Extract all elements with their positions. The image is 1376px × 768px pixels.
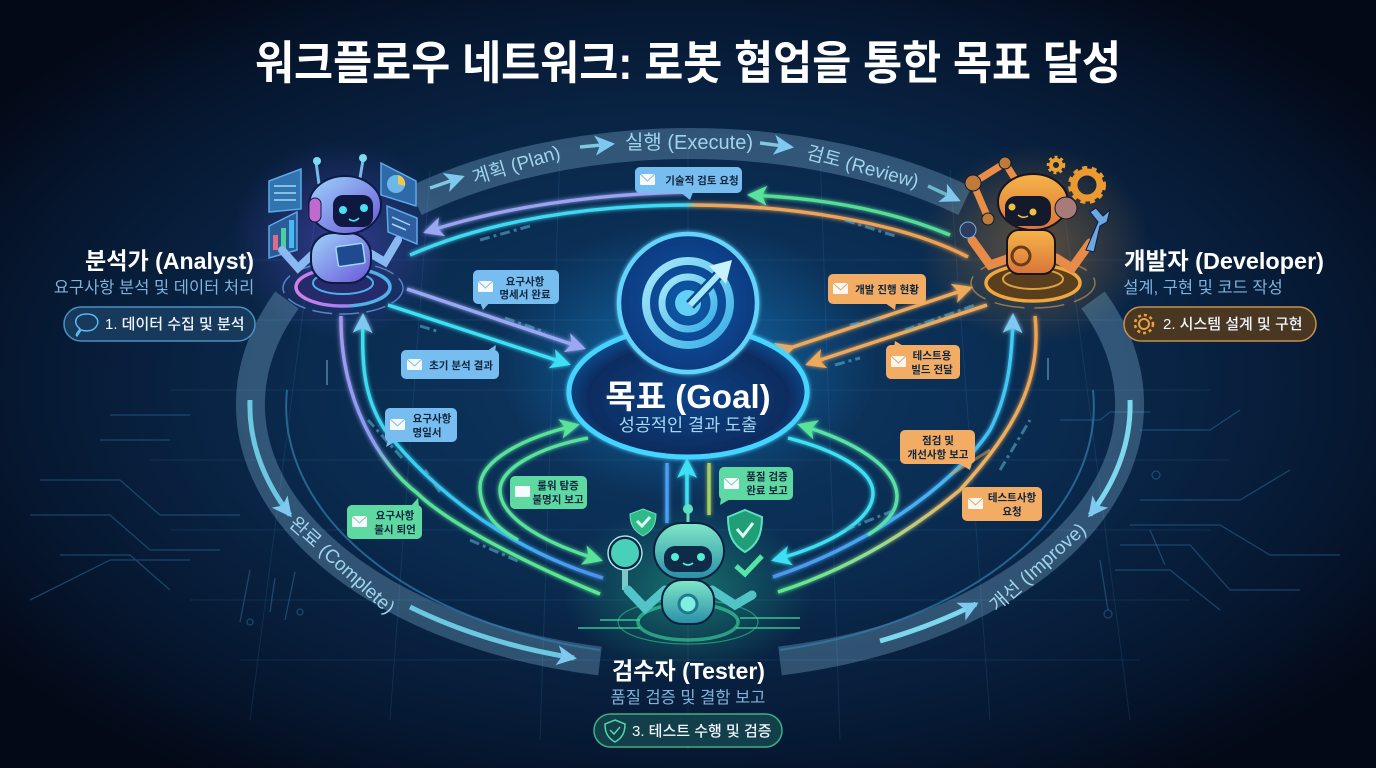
wrench [1086,208,1110,252]
robot arm [965,157,1017,225]
band segment top [415,144,965,201]
label: developer: 개발자 (Developer) [1124,248,1324,274]
message bubble: 요구사항 불시 퇴언: 불시 퇴언 [374,523,416,536]
magnifier [608,536,642,590]
goal oval [569,327,807,457]
loop: right outer [800,425,897,535]
message bubble: 룰워 탐증 불명지 보고 [510,476,587,509]
label: tester: 검수자 (Tester) [612,658,765,684]
message bubble: 테스트용 빌드 전달: 빌드 전달 [911,364,953,376]
robot: analyst [269,154,417,314]
glow: developer [920,145,1150,345]
message bubble: 초기 분석 결과 [401,345,499,379]
loop: left inner [500,438,600,560]
arms [282,240,398,268]
robot: tester [578,504,800,644]
arrow: green from developer [750,195,950,235]
band arrow review end [928,186,958,200]
floating panels [269,163,417,258]
pill: analyst task [64,307,255,341]
label: developer: 설계, 구현 및 코드 작성 [1123,278,1283,297]
arrow: goal and developer double headed [793,288,970,347]
message bubble: 요구사항 명일서 [385,408,457,447]
band segment left [250,300,600,661]
glow: tester [563,505,813,675]
label: analyst: 요구사항 분석 및 데이터 처리 [54,278,254,297]
band label improve: 개선 (Improve) [985,519,1091,616]
message bubble: 테스트용 빌드 전달 [886,341,960,379]
arrow: tester to analyst [363,316,603,578]
goal subtitle: 성공적인 결과 도출 [619,415,757,435]
message bubble: 테스트 사항 요청: 요청 [1002,505,1022,518]
message bubble: 품질 검증 완료 보고 [719,467,793,505]
arrow: tester to goal centre [685,461,689,510]
platform [578,600,800,644]
message bubble: 요구사항 명일서: 명일서 [413,426,441,439]
label: tester: 품질 검증 및 결함 보고 [611,688,765,707]
platform [283,262,403,314]
arrow: to analyst [426,192,690,232]
band label complete: 완료 (Complete) [285,512,399,619]
outer cycle band [250,143,1130,661]
antennae [316,160,363,184]
loop: right inner [774,438,873,560]
message bubble: 테스트 사항 요청: 테스트사항 [988,491,1036,504]
platform [971,258,1095,308]
message bubble: 점검 및 개선사항 보고: 개선사항 보고 [908,448,969,461]
message bubble: 기술적 검토 요청: 기술적 검토 요청 [665,174,739,187]
message bubble: 요구사항 불시 퇴언 [347,498,422,539]
label: analyst: 분석가 (Analyst) [85,248,254,274]
band arrow execute [580,144,612,147]
arms [972,240,1090,268]
arrow: analyst to goal cyan [388,305,568,364]
message bubble: 점검 및 개선사항 보고 [900,430,975,470]
message bubble: 룰워 탐증 불명지 보고: 불명지 보고 [532,493,584,506]
band label execute: 실행 (Execute) [625,131,753,154]
shield small [630,509,656,536]
data dashes [327,220,1048,562]
message bubble: 개발 진행 현황: 개발 진행 현황 [855,283,919,296]
band arrow bottom right [880,604,976,641]
loop: left outer [480,425,577,540]
message bubble: 품질 검증 완료 보고: 완료 보고 [746,484,788,497]
pill: developer task [1124,307,1316,341]
goal title: 목표 (Goal) [605,378,771,415]
check marks [637,517,762,574]
message bubble: 점검 및 개선사항 보고: 점검 및 [922,435,954,447]
message bubble: 초기 분석 결과: 초기 분석 결과 [429,359,493,372]
network connection lines [341,192,1036,594]
message bubble: 요구사항 명세서 완료 [473,270,559,310]
robot: developer [960,157,1110,308]
band arrow review start [760,143,791,147]
pill: developer task: 2. 시스템 설계 및 구현 [1163,316,1303,333]
message bubble: 요구사항 명세서 완료: 요구사항 [506,275,545,288]
band segment right [780,300,1130,661]
torso [1007,230,1055,274]
message bubble: 품질 검증 완료 보고: 품질 검증 [746,471,788,483]
band arrow plan [430,177,462,188]
line: top cyan to orange [410,205,968,257]
torso [311,233,371,283]
line: centre left [665,463,669,523]
message bubble: 테스트용 빌드 전달: 테스트용 [913,349,952,362]
message bubble: 요구사항 불시 퇴언: 요구사항 [376,509,415,522]
pill: tester task: 3. 테스트 수행 및 검증 [632,723,772,740]
line: centre right [707,463,711,515]
band label plan: 계획 (Plan) [470,141,563,189]
arms [628,590,752,608]
label: tester [594,658,782,747]
arrow: analyst to goal purple [407,289,583,348]
line: analyst outer to tester [341,316,600,594]
goal node [569,234,807,457]
label: analyst [54,248,255,341]
line: developer outer to tester [778,316,1036,592]
arrow: developer to goal [808,305,987,364]
thin inner ring [286,390,1094,650]
pill: tester task [594,714,782,747]
shield large [728,510,762,552]
message bubble: 기술적 검토 요청 [635,167,742,200]
head [998,174,1068,230]
band arrow right [1090,400,1130,515]
band label review: 검토 (Review) [804,142,921,193]
band arrow bottom left [410,607,574,658]
message bubble: 요구사항 명세서 완료: 명세서 완료 [499,288,551,301]
glow: goal [498,220,878,500]
antenna [686,512,690,525]
message bubble: 테스트 사항 요청 [962,487,1042,521]
message bubble: 개발 진행 현황 [828,274,926,310]
band arrow left [250,400,290,515]
goal target circle [619,234,757,372]
gear small [1048,157,1064,173]
label: developer [1123,248,1324,341]
message bubble: 룰워 탐증 불명지 보고: 룰워 탐증 [537,479,579,492]
pill: analyst task: 1. 데이터 수집 및 분석 [105,316,245,333]
torso [662,580,714,624]
title: 워크플로우 네트워크: 로봇 협업을 통한 목표 달성 [255,37,1121,89]
head [309,176,381,234]
gear large [1070,168,1104,202]
arrow: tester to developer [773,316,1013,577]
glow: analyst [230,140,450,340]
message bubble: 요구사항 명일서: 요구사항 [413,412,452,425]
head [654,523,724,579]
